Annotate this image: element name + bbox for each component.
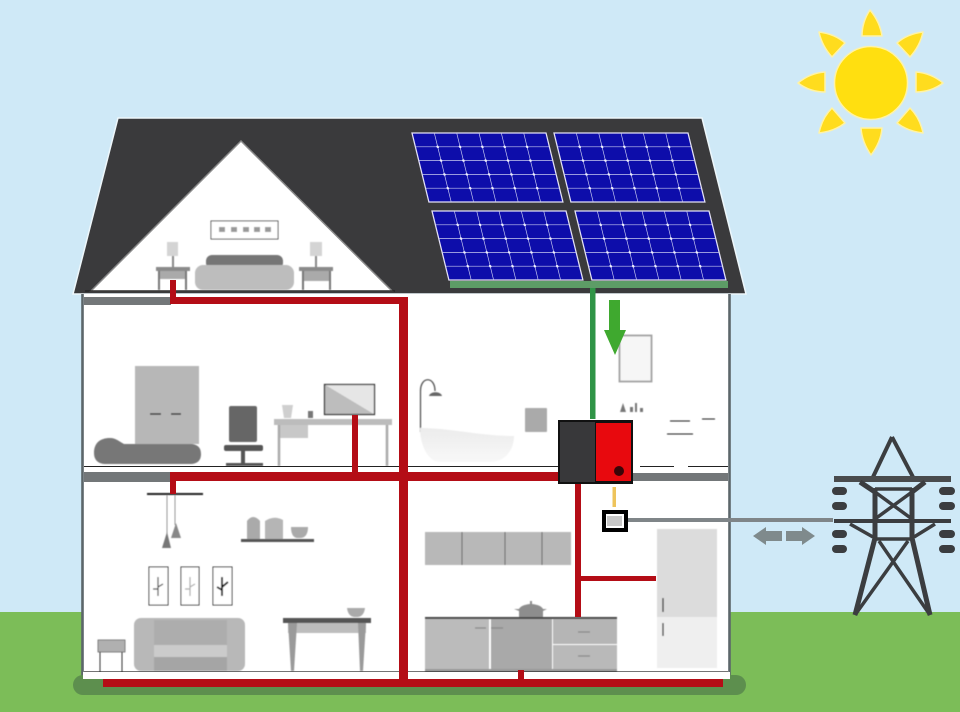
ground xyxy=(0,612,960,712)
base cabinets xyxy=(425,617,617,672)
wall shelf xyxy=(241,517,314,542)
left bedside table and lamp xyxy=(156,242,190,290)
wall mirror xyxy=(620,336,652,382)
house body xyxy=(83,294,730,680)
house roof xyxy=(73,118,746,294)
sofa xyxy=(134,618,245,671)
solar panels xyxy=(412,133,726,280)
dining table xyxy=(283,608,371,671)
refrigerator xyxy=(657,529,717,668)
wardrobe xyxy=(135,366,199,444)
kitchen furniture xyxy=(425,529,717,672)
concrete floor slabs xyxy=(84,297,728,482)
panel mounting rail xyxy=(450,281,728,288)
icon: transmission tower xyxy=(832,437,955,615)
green solar cable xyxy=(590,288,596,419)
bathroom fixtures xyxy=(420,336,715,462)
sink lines xyxy=(667,419,715,434)
inverter xyxy=(558,420,633,484)
yellow connector xyxy=(612,487,616,507)
office chair xyxy=(224,406,263,466)
living room furniture xyxy=(98,493,371,672)
attic furniture xyxy=(156,221,333,290)
cooking pot xyxy=(514,601,547,617)
shower xyxy=(420,380,442,432)
toiletries xyxy=(620,403,643,412)
right bedside table and lamp xyxy=(299,242,333,290)
wall picture xyxy=(211,221,278,239)
grid meter xyxy=(604,512,626,530)
icon: sun xyxy=(798,10,943,155)
waste bin xyxy=(525,408,547,432)
house base xyxy=(83,672,730,679)
arrow: grid exchange xyxy=(753,527,815,545)
computer monitor xyxy=(324,384,374,414)
arrow: solar power down xyxy=(604,300,626,355)
desk xyxy=(274,405,392,466)
bathtub xyxy=(420,428,514,462)
bed xyxy=(195,255,294,290)
framed pictures xyxy=(149,567,232,605)
floor lines and wall outline xyxy=(82,291,730,677)
bedroom furniture xyxy=(94,366,392,466)
foundation xyxy=(73,675,746,695)
pendant lamps xyxy=(147,493,203,548)
wall cabinets xyxy=(425,532,571,565)
grid cable xyxy=(628,518,833,522)
daybed xyxy=(94,438,201,464)
side table xyxy=(98,640,125,672)
red power wiring xyxy=(103,280,723,687)
attic room xyxy=(91,141,392,291)
